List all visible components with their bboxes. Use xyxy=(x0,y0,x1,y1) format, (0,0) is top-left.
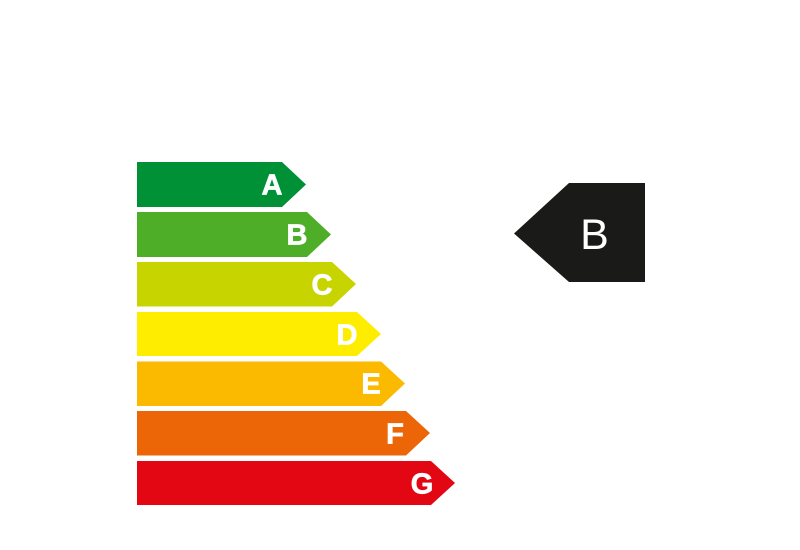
bar G xyxy=(137,461,455,505)
bar C: C xyxy=(312,270,333,302)
bar C xyxy=(137,262,356,306)
bar D: D xyxy=(337,320,357,352)
marker letter: B xyxy=(580,211,609,259)
bar A: A xyxy=(262,170,283,202)
black arrow xyxy=(514,183,645,282)
bar F xyxy=(137,411,430,456)
energy rating scale xyxy=(137,162,455,505)
bar D xyxy=(137,312,381,356)
bar B xyxy=(137,212,331,257)
current rating marker xyxy=(514,183,645,282)
bar B: B xyxy=(287,220,307,252)
bar F: F xyxy=(386,418,404,450)
bar A xyxy=(137,162,306,207)
bar G: G xyxy=(411,468,433,500)
bar E: E xyxy=(361,368,381,400)
bar E xyxy=(137,362,405,406)
